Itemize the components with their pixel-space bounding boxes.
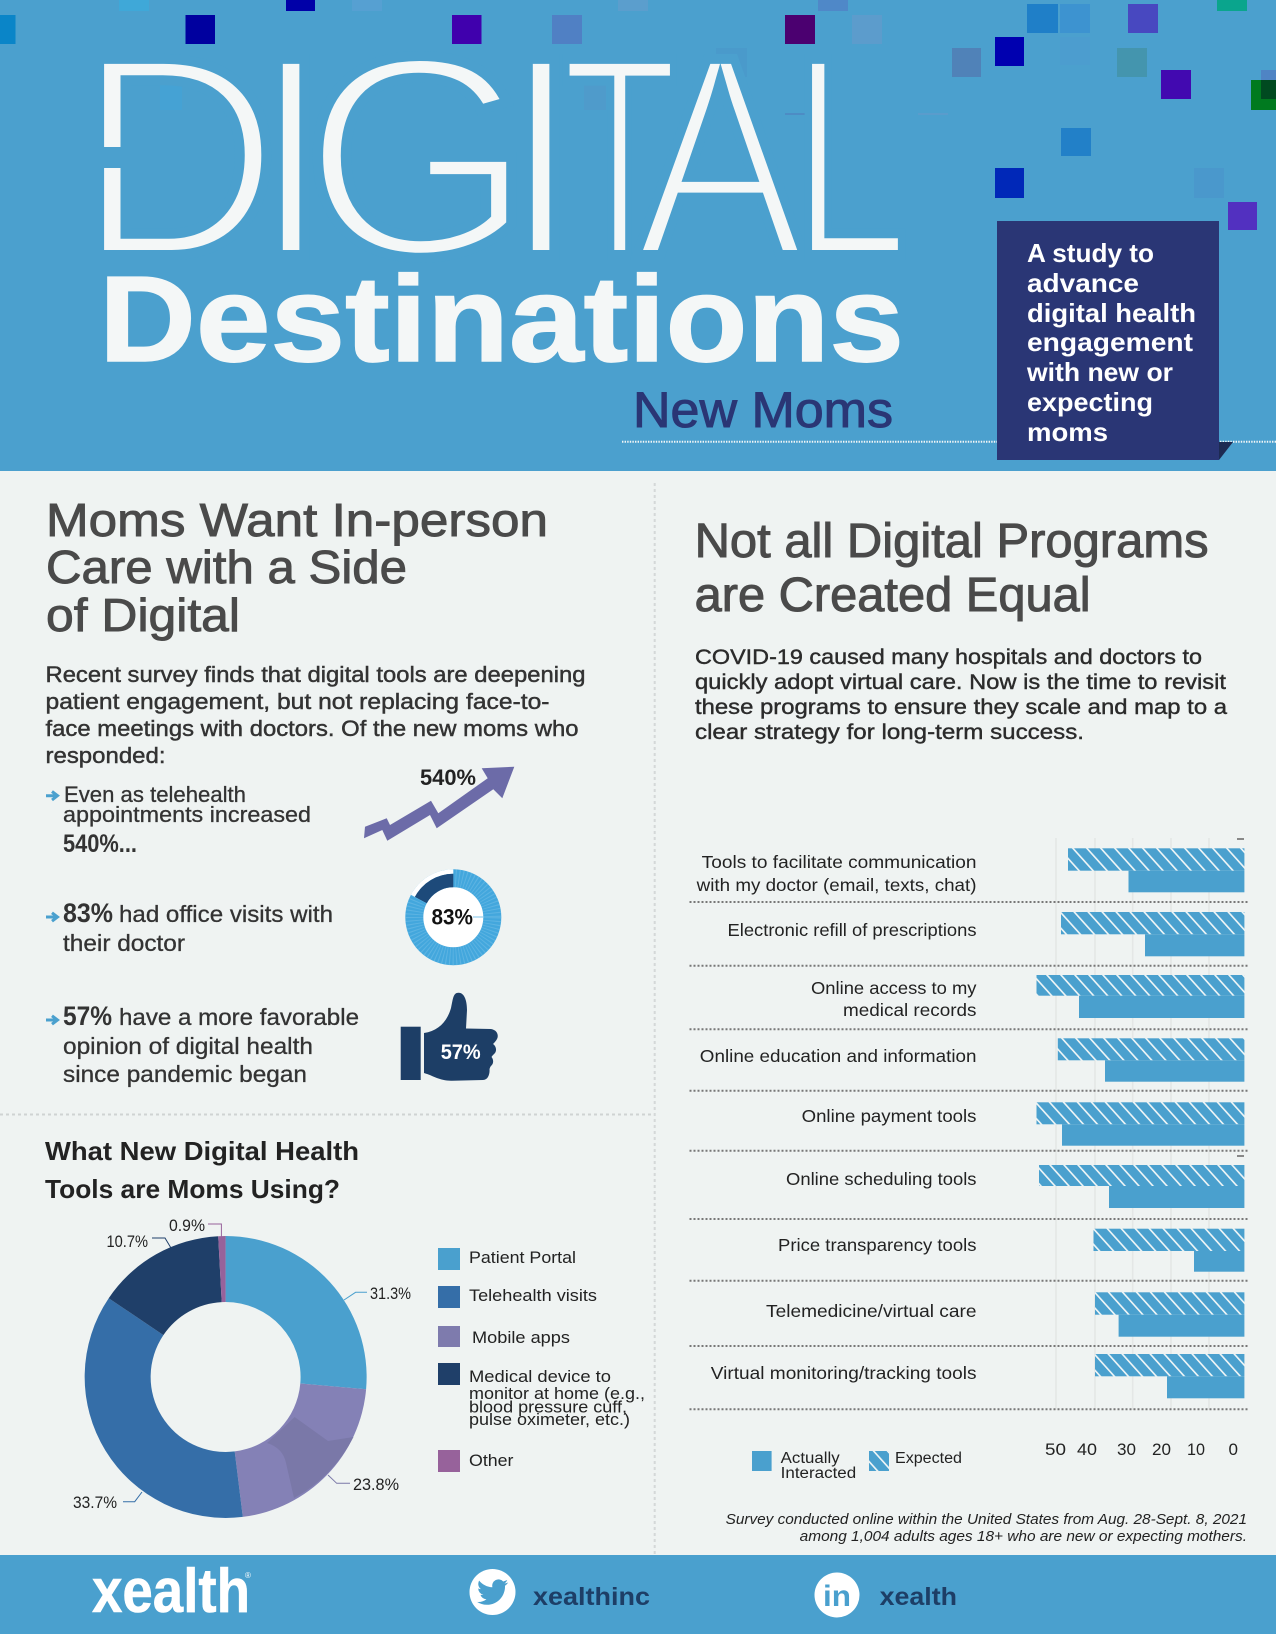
donut legend: Patient Portal	[469, 1249, 576, 1267]
donut legend: blood pressure cuff,	[469, 1399, 627, 1417]
bar labels: medical records	[843, 1000, 977, 1020]
stat: telehealth 540%: Even as telehealth	[64, 782, 246, 807]
callout: study description: A study to	[1027, 238, 1154, 268]
donut legend: pulse oximeter, etc.)	[469, 1411, 630, 1429]
heading: what new digital health tools	[45, 1136, 359, 1204]
donut legend: Other	[469, 1452, 514, 1470]
donut chart	[73, 1217, 411, 1518]
twitter handle: xealthinc	[533, 1583, 650, 1611]
stat: 57% favorable opinion: 57%	[63, 1001, 112, 1031]
stat: 83% office visits: 83%	[63, 898, 113, 928]
callout: study description: engagement	[1027, 327, 1193, 357]
bar labels: Online education and information	[700, 1046, 976, 1066]
heading: what new digital health tools: What New Digital Health	[45, 1136, 359, 1166]
bars: tools to facilitate communication	[1068, 848, 1244, 892]
icon: thumbs up 57%	[401, 993, 498, 1081]
bars: online scheduling	[1039, 1165, 1244, 1208]
donut legend: Medical device to	[469, 1368, 611, 1386]
donut legend	[438, 1248, 645, 1472]
icon: linkedin	[814, 1572, 860, 1618]
axis labels: 10	[1187, 1440, 1205, 1459]
callout: study description	[997, 221, 1233, 460]
bar labels: Price transparency tools	[778, 1235, 977, 1255]
stat: 83% office visits: their doctor	[63, 930, 185, 956]
title: DIGITAL: T	[562, 0, 678, 316]
title: DIGITAL: A	[636, 0, 805, 316]
title: DIGITAL: D	[76, 0, 280, 316]
axis labels	[1045, 1440, 1238, 1459]
icon: rising arrow 540%	[364, 765, 514, 841]
panel: in-person care	[46, 494, 586, 1087]
bar labels: Tools to facilitate communication	[702, 852, 976, 872]
axis labels: 30	[1117, 1440, 1136, 1459]
callout: study description: digital health	[1027, 298, 1196, 328]
axis labels: 50	[1045, 1440, 1066, 1459]
covid paragraph: these programs to ensure they scale and map to a	[695, 695, 1227, 719]
logo: xealth: ®	[245, 1571, 251, 1580]
footer	[0, 1555, 1276, 1634]
covid paragraph: clear strategy for long-term success.	[695, 720, 1084, 744]
intro paragraph	[46, 662, 586, 768]
intro paragraph: patient engagement, but not replacing face-to-	[46, 689, 550, 714]
heading: what new digital health tools: Tools are Moms Using?	[45, 1174, 340, 1204]
header banner	[0, 0, 1276, 471]
donut legend: monitor at home (e.g.,	[469, 1385, 645, 1403]
survey footnote	[726, 1511, 1247, 1545]
heading: moms want in-person care: Moms Want In-person	[46, 494, 548, 546]
bar chart: expected vs actually interacted	[690, 838, 1249, 1459]
bar chart legend: Expected	[895, 1450, 962, 1467]
donut chart: 31.3%	[370, 1285, 411, 1303]
stat: telehealth 540%: 540%...	[63, 830, 137, 858]
donut chart: 10.7%	[106, 1233, 148, 1251]
bar labels: Online scheduling tools	[786, 1169, 977, 1189]
title: DIGITAL: I	[252, 0, 331, 316]
callout: study description: advance	[1027, 268, 1139, 298]
bars: electronic refill	[1061, 912, 1244, 956]
title: DIGITAL: I	[502, 0, 581, 316]
subtitle: New Moms: New Moms	[633, 382, 893, 438]
bar chart legend: Interacted	[781, 1465, 856, 1482]
stat: 57% favorable opinion: opinion of digital health	[63, 1033, 313, 1059]
donut icon: 83%	[411, 869, 492, 956]
title: Destinations: Destinations	[99, 251, 904, 387]
heading: moms want in-person care	[46, 494, 548, 641]
stat: telehealth 540%	[46, 782, 311, 858]
intro paragraph: Recent survey finds that digital tools are deepening	[46, 662, 586, 687]
stat: telehealth 540%: appointments increased	[63, 802, 311, 827]
panel: digital programs	[690, 514, 1249, 1545]
heading: not all digital programs	[695, 514, 1209, 622]
heading: not all digital programs: are Created Equal	[695, 568, 1091, 622]
intro paragraph: responded:	[46, 743, 166, 768]
stat: 83% office visits	[46, 898, 333, 956]
bars: online payment	[1036, 1102, 1244, 1146]
covid paragraph: quickly adopt virtual care. Now is the time to revisit	[695, 670, 1226, 694]
donut chart: 33.7%	[73, 1494, 117, 1512]
axis labels: 40	[1077, 1440, 1097, 1459]
donut icon: 83%: 83%	[432, 904, 473, 930]
bar labels: Virtual monitoring/tracking tools	[711, 1363, 977, 1383]
donut legend: Mobile apps	[472, 1329, 570, 1347]
icon: linkedin: in	[823, 1580, 851, 1613]
logo: xealth: xealth	[92, 1557, 250, 1626]
bar labels: Telemedicine/virtual care	[766, 1301, 976, 1321]
callout: study description: moms	[1027, 417, 1108, 447]
icon: thumbs up 57%: 57%	[441, 1041, 481, 1064]
bar labels: Electronic refill of prescriptions	[728, 920, 977, 940]
covid paragraph: COVID-19 caused many hospitals and doctors to	[695, 645, 1202, 669]
decorative pixel squares	[0, 0, 1276, 230]
bars: telemedicine	[1095, 1292, 1244, 1337]
stat: 57% favorable opinion: have a more favorable	[119, 1004, 359, 1030]
title: DIGITAL: G	[303, 0, 534, 316]
intro paragraph: face meetings with doctors. Of the new moms who	[46, 716, 578, 741]
survey footnote: Survey conducted online within the United States from Aug. 28-Sept. 8, 2021	[726, 1511, 1247, 1528]
title: DIGITAL	[76, 0, 909, 316]
bars: virtual monitoring	[1095, 1354, 1244, 1398]
bars: online education	[1058, 1038, 1244, 1082]
title: DIGITAL: L	[791, 0, 909, 316]
icon: rising arrow 540%: 540%	[420, 765, 476, 790]
stat: 83% office visits: had office visits with	[119, 901, 333, 927]
axis labels: 20	[1152, 1440, 1171, 1459]
callout: study description: with new or	[1026, 357, 1173, 387]
panel: digital health tools donut	[45, 1136, 645, 1518]
bar chart legend	[752, 1450, 962, 1482]
heading: not all digital programs: Not all Digital Programs	[695, 514, 1209, 568]
stat: 57% favorable opinion: since pandemic began	[63, 1061, 307, 1087]
bar labels: Online access to my	[811, 978, 977, 998]
donut legend: Telehealth visits	[469, 1287, 597, 1305]
donut chart: 0.9%	[169, 1217, 205, 1235]
bars: online access	[1036, 975, 1244, 1018]
heading: moms want in-person care: of Digital	[46, 589, 240, 641]
bars: price transparency	[1094, 1229, 1244, 1272]
stat: 57% favorable opinion	[46, 1001, 359, 1087]
icon: twitter	[470, 1569, 516, 1615]
bar labels: Online payment tools	[802, 1106, 977, 1126]
callout: study description: expecting	[1027, 387, 1153, 417]
bar labels: with my doctor (email, texts, chat)	[696, 875, 976, 895]
axis labels: 0	[1228, 1440, 1238, 1459]
donut chart: 23.8%	[353, 1476, 399, 1494]
linkedin handle: xealth	[880, 1583, 957, 1611]
bar chart legend: Actually	[781, 1450, 840, 1467]
heading: moms want in-person care: Care with a Side	[46, 541, 407, 593]
survey footnote: among 1,004 adults ages 18+ who are new or expecting mothers.	[800, 1528, 1247, 1545]
bar labels	[696, 852, 977, 1383]
covid paragraph	[695, 645, 1227, 744]
